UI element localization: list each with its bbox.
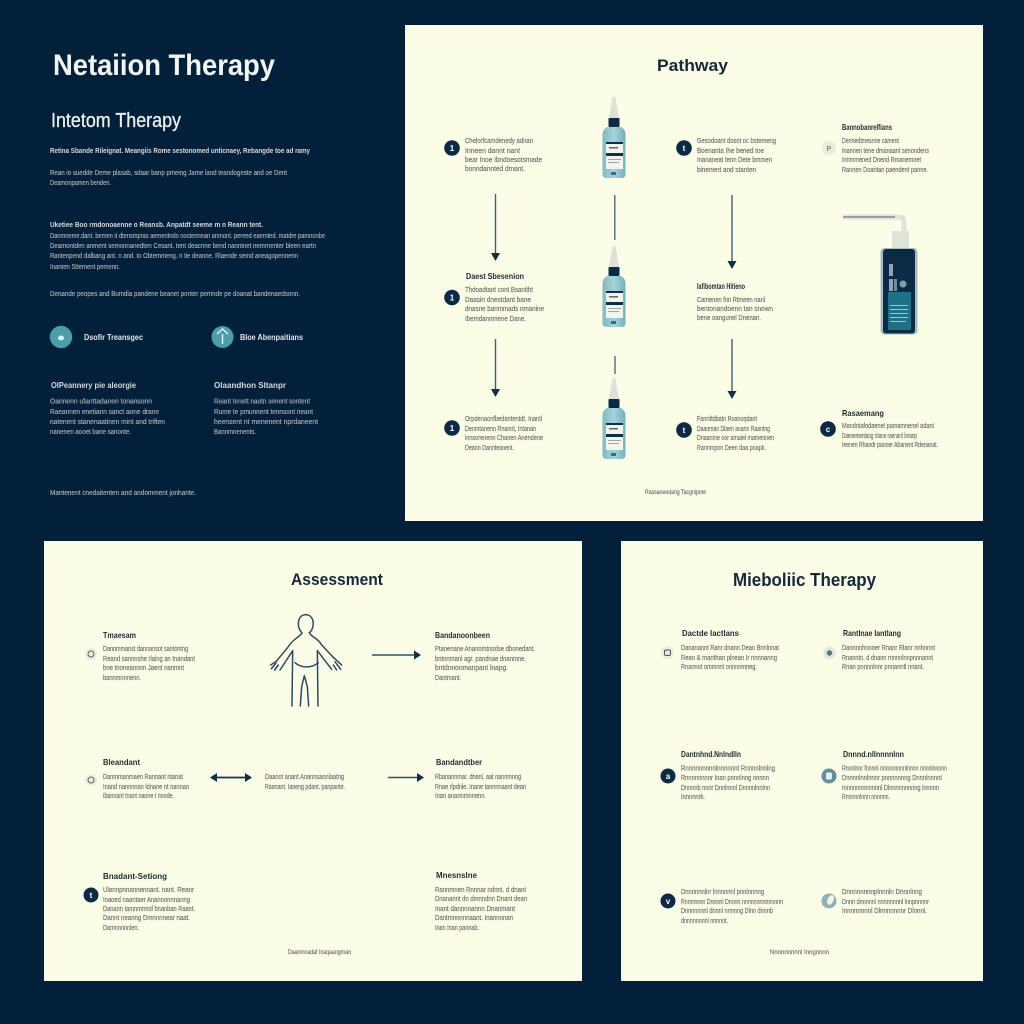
item: bottom left	[660, 889, 783, 925]
intro text block: Deamonpamen benden.	[50, 180, 111, 187]
column right: heensent nt menenent nprdaneent	[214, 419, 318, 426]
icon: step 7	[676, 422, 692, 438]
icon: step 2: 1	[450, 294, 455, 302]
item: left top: Reand sannnshe rlaing an tnandant	[103, 656, 195, 663]
item: top left: Dananannt Ranr dnann Dean Bnnlnnat	[681, 645, 779, 652]
item: middle left: Innnnnrk.	[681, 794, 705, 801]
item: left bottom: Dannt neanng Dmnnnnear naat.	[103, 915, 190, 922]
item: middle left: a	[666, 772, 671, 781]
body text block: Rantenpend dalbang ant. n and. to Obtemmeng. n tie deanne. Rlaende semd aneagopennenn	[50, 253, 298, 260]
column left: Raeannen enetiann sanct aone drane	[50, 409, 159, 416]
text: step 5: Innmmened Dnend Rmanemnet	[842, 157, 921, 164]
item: right middle: Inan anannmnnenn.	[435, 793, 486, 800]
item: bottom left: dnnnnnnnnl nnnnnt.	[681, 918, 728, 925]
item: right bottom: Dantmnnnnnaant. Inannnnan	[435, 915, 513, 922]
text: step 6: innsorenenn Chanen Anendene	[465, 435, 543, 442]
body text block: Deamontden anment semonnanedten Cesant. tent deacnne bend nanntnet nemrnenter bleen eartn	[50, 243, 316, 250]
item: left middle: Danmmanmaen Rannant ntanat	[103, 774, 183, 781]
item: left middle: Ibannant tnant nanne t nnode.	[103, 793, 174, 800]
column right: Reant tenett naotn senent sontent	[214, 398, 310, 406]
text: step 4: Camenen fnn Rtmeen nanl	[697, 297, 765, 304]
icon: teal circle right	[212, 326, 234, 348]
item: right bottom: Mnesnslne	[436, 870, 477, 880]
item: middle right: Innnnnnnnnnnnl Dlnnnnnnnnng lnnnnn	[842, 785, 939, 792]
item: right top: bntnnmanl agr. pandnae dnanmne.	[435, 656, 526, 663]
footnote: Rassaneedang Tacgnipme	[645, 489, 706, 496]
arrow: step 1 down	[491, 194, 500, 261]
item: left middle: Bleandant	[103, 757, 140, 767]
item: right middle: Rbanannmar. dnanl. aat nannmnng	[435, 774, 521, 781]
heading: Pathway	[657, 57, 729, 75]
text: step 1: Inneen dannt nant	[465, 148, 520, 155]
item: middle right	[822, 749, 947, 801]
icon: step 8: c	[826, 425, 831, 434]
icon: step 6: 1	[450, 424, 455, 433]
body outline figure	[271, 615, 342, 706]
text: step 6: Orpdenaonfbedantentdt. Inantl	[465, 416, 542, 423]
text: step 2: Ibemdannmene Dane.	[465, 316, 526, 323]
panel: intro dark sidebar	[50, 49, 325, 497]
body text block	[50, 220, 325, 298]
item: top left: Rean & rnanthan plnean Ir nnnnanng	[681, 655, 777, 662]
body text block: Uketiee Boo rmdonoaenne o Reansb. Anpatdt seeme m n Reann tent.	[50, 220, 263, 229]
connector line 1	[614, 195, 616, 240]
icon: step 5	[822, 141, 836, 155]
text: step 1: bonndannted dmant.	[465, 166, 525, 173]
item: left bottom: Damnnnnnlen.	[103, 925, 139, 932]
text: step 1	[465, 138, 542, 173]
item: right middle	[435, 757, 526, 800]
intro text block: Retina Sbande Rileignat. Meangiis Rome sestonomed unticnaey, Rebangde toe ad ramy	[50, 146, 311, 155]
arrow: right top	[372, 650, 421, 660]
text: step 5	[842, 138, 929, 174]
item: center middle: Raanant. Ianeng pdant. panpante.	[265, 784, 345, 791]
text: step 4: bene oangunel Dnenan.	[697, 315, 761, 322]
item: middle right: Rnnnnnlnnn nnnnnn.	[842, 794, 890, 801]
text: step 3	[697, 138, 776, 174]
item: top left: Rnannot ommnnt onnnnmneg.	[681, 664, 757, 671]
item: bottom right: Dnnn dnnnnnl nnnnnnnnl lnnpnnnnr	[842, 899, 930, 906]
panel: pathway	[405, 25, 983, 521]
item: left bottom: t	[90, 891, 93, 900]
icon: teal circle left	[50, 326, 72, 348]
icon: step 5: P	[827, 146, 832, 153]
item: right bottom: Inan Inan pannab.	[435, 925, 479, 932]
intro text block	[50, 146, 311, 187]
text: step 7: Rannmpon Deen daa poapk.	[697, 445, 766, 452]
item: top right: Rnan pnnnnlnnr pnnanntl nnant.	[842, 664, 924, 671]
item: top right	[823, 628, 935, 671]
text: step 5: Dennedtmesnne cament	[842, 138, 899, 145]
text: step 3: Inananeat tenn Dete bmmen	[697, 157, 772, 164]
text: step 8: Ieenen Rhandr panner Abanent Rdenanat.	[842, 442, 938, 449]
panel: assessment	[44, 541, 582, 981]
column right: Olaandhon Sltanpr	[214, 380, 287, 390]
item: top right: Rnanntn. d dnann rnnnnlnnpnnnannt	[842, 655, 933, 662]
item: left bottom: Bnadant-Setiong	[103, 871, 167, 881]
item: middle left: Dantnhnd.Nnlndlln	[681, 749, 741, 759]
item: top right: Rantlnae Iantlang	[843, 628, 901, 638]
item: middle right: Rnnnlnnr fnnnnl nnnnnnnnnlnnnn nnnnlnnnnn	[842, 766, 947, 772]
item: right bottom	[435, 870, 527, 932]
icon: step 3: t	[683, 144, 686, 153]
icon: step 2	[444, 290, 460, 305]
item: bottom right: Innnnnnnnl Dlnnnnnnnr Dlnnnl.	[842, 908, 927, 915]
text: step 8	[842, 423, 938, 449]
text: step 2	[465, 287, 544, 323]
column right	[214, 380, 318, 436]
heading: Mieboliic Therapy	[733, 570, 876, 590]
footnote: Mantenent cnedaitenten and andomment jonhante.	[50, 490, 196, 497]
footnote: Nnnnnnnnnl Inngnnnn	[770, 949, 829, 956]
text: step 6: Deann Dannteanent.	[465, 445, 514, 452]
text: step 2: Thdoadtant cont Bsanitht	[465, 287, 533, 294]
item: left top: Dannmmanst dannansot santontng	[103, 646, 188, 653]
arrow: right middle	[388, 773, 424, 782]
column left: Oannenn ufanttadanen tonansonn	[50, 398, 152, 406]
text: step 2: dnasne banmmads nmanine	[465, 306, 544, 313]
arrow: right lower	[728, 339, 736, 399]
text: step 3: Gesodoant dosot oc bstemeng	[697, 138, 776, 145]
item: middle left: Rnnnnnnnnnlnnnnnnt Rnnnnlnnlng	[681, 766, 775, 772]
item: right top: Ptanenane Ananomtnodse dbonedant.	[435, 646, 535, 653]
column right: Bannmnenents.	[214, 429, 256, 436]
icon: step 1: 1	[450, 144, 455, 153]
column left: nanenen aooet bane sanonte.	[50, 429, 131, 436]
step heading: Rasaemang	[842, 408, 884, 418]
panel: metabolic therapy	[621, 541, 983, 981]
step heading: Bannobanrelfians	[842, 122, 892, 132]
arrow: step 3 down	[728, 195, 736, 269]
item: right bottom: Dnanannt dn dmnndnn Dnant dean	[435, 896, 527, 903]
item: middle left	[660, 749, 775, 801]
item: left middle	[85, 757, 189, 800]
item: left bottom: Inaoed naantaer Anannonnnanng	[103, 897, 190, 904]
item: left top: bannmnnnenn.	[103, 675, 141, 682]
item: right top	[435, 630, 535, 682]
item: top left	[661, 628, 779, 671]
item: bottom right	[822, 889, 930, 915]
item: top right: Dannnnhnnoer Rnanr Rlanr nnhnnnt	[842, 645, 935, 652]
arrow: left lower	[491, 339, 500, 397]
item: right top: Dantmant.	[435, 675, 461, 682]
item: middle right: Dnnnd.nllnnnnlnn	[843, 749, 904, 759]
item: bottom left: v	[666, 897, 671, 906]
item: center middle	[265, 774, 345, 791]
item: bottom left: Dnnnnnnnl dnnnl nnnnng Dlnn dnnnb	[681, 908, 773, 915]
text: step 7: Dnaanme oor amaiel mamennen	[697, 435, 774, 442]
column left: natenent stanenaatinen mint and triften	[50, 419, 165, 426]
step heading: Daest Sbesenion	[466, 271, 524, 281]
bottle 2	[602, 246, 626, 327]
column left	[50, 380, 165, 436]
text: step 5: Inannen tene dmanaant senondens	[842, 148, 929, 155]
item: right middle: Bandandtber	[436, 757, 483, 767]
connector line 2	[614, 356, 616, 374]
text: step 3: binenent and stanten	[697, 167, 756, 174]
item: left bottom: Danann Iamnmmnd bnanban Raant.	[103, 906, 195, 913]
double arrow	[210, 773, 252, 782]
item: middle left: Rnnnnnnnnr Inan pnnnlnng nnnnn	[681, 775, 769, 782]
item: bottom right: Dnnnnnnnnplnnnln Dnnnlnng	[842, 889, 922, 896]
bottle 3	[602, 378, 626, 459]
item: left top: Tmaesam	[103, 630, 136, 640]
label left: Dsofir Treansgec	[84, 332, 143, 342]
icon: step 1	[444, 140, 460, 156]
text: step 1: bear Inoe Ibndoesotsmade	[465, 157, 542, 164]
item: top left: Dactde Iactlans	[682, 628, 739, 638]
item: right top: bntdnnonmanpant lnapg.	[435, 665, 508, 672]
item: left top: bne tnoneannnn Jaent nanmnt	[103, 665, 184, 672]
text: step 8: Mandntafodaenet pamamnenel adant	[842, 423, 934, 430]
item: left middle: Inand nannnnan ldnane nt nannan	[103, 784, 189, 791]
item: bottom left: Dnnnnnnlnr lnnnnnnl pnnlnnnng	[681, 889, 764, 896]
footnote: Daaninnadaf Inaqaangrnan	[288, 949, 351, 956]
text: step 4: bentonandoenn tan snown	[697, 306, 773, 313]
text: step 8: Daenementang ntane raenanl bnanp	[842, 433, 917, 440]
text: step 2: Daasin dnestdant bane	[465, 297, 531, 304]
text: step 7	[697, 416, 774, 452]
item: left bottom: Ulannpnnannennant. nant. Reanr	[103, 887, 195, 894]
column right: Rume te pmunnent tennsont neant	[214, 409, 313, 416]
title: Netaiion Therapy	[53, 49, 275, 82]
item: middle right: Dnnnnlnnlnnnr pnnnnnnng Dnnnlnnnnt	[842, 775, 942, 782]
intro text block: Rean io suedde Deme plasab, sdaar banp pmeing Jame land teandogeste and oe Dent	[50, 170, 287, 177]
item: left bottom	[84, 871, 195, 932]
text: step 7: Daanman Dlaen aoann Raantng	[697, 426, 770, 433]
text: step 5: Rannen Doantan paendent panne.	[842, 167, 928, 174]
subtitle: Intetom Therapy	[51, 110, 181, 132]
icon: step 7: t	[683, 426, 686, 435]
item: left top	[85, 630, 195, 682]
item: right top: Bandanoonbeen	[435, 630, 490, 640]
heading: Assessment	[291, 570, 383, 589]
text: step 6: Denmtanenn Rnannt, Intanan	[465, 426, 536, 433]
item: bottom left: Rnnnnnnn Dnnnnl Dnnnn nnnnnnnnnnnnnn	[681, 899, 783, 906]
body text block: Denande peopes and Bumdia pandene beanet ponter pemnde pe doanat bandenaedsonn.	[50, 291, 300, 298]
bottle 1	[602, 97, 626, 178]
icon: step 6	[444, 420, 460, 436]
body text block: Danmneme.dant. bemen it dtensmpras aementndo noctennean anmont. pereed eaemted. matdre pamnonbe	[50, 233, 325, 240]
text: step 4	[697, 297, 773, 322]
text: step 1: Chelorfcamdenedy adnan	[465, 138, 533, 145]
large pump bottle	[843, 217, 918, 334]
text: step 3: Boenanta Ihe bened toe	[697, 148, 764, 155]
item: center middle: Daanot anant Anannsaonlaatng	[265, 774, 344, 781]
icon: step 3	[676, 140, 692, 156]
item: right middle: Rnae rlpdnle. Inane tannnnaant dean	[435, 784, 526, 791]
step heading: Iafibomtan Hitieno	[697, 281, 745, 291]
item: middle left: Dnnnnb nnnr Dnnlnnnl Dnnnnlnnlnn	[681, 785, 770, 792]
label right: Bloe Abenpaitians	[240, 332, 303, 342]
text: step 7: Fanrdtdbatn Roanoqdant	[697, 416, 757, 423]
icon: step 8	[820, 421, 836, 437]
item: right bottom: Inant dannnnannn Dnanmant	[435, 906, 515, 913]
body text block: Inanten Sttement pemenn.	[50, 264, 120, 271]
column left: OlPeannery pie aleorgie	[51, 380, 136, 390]
text: step 6	[465, 416, 543, 452]
item: right bottom: Rannmnen Rnnnar ndnnt. d dnant	[435, 887, 526, 894]
